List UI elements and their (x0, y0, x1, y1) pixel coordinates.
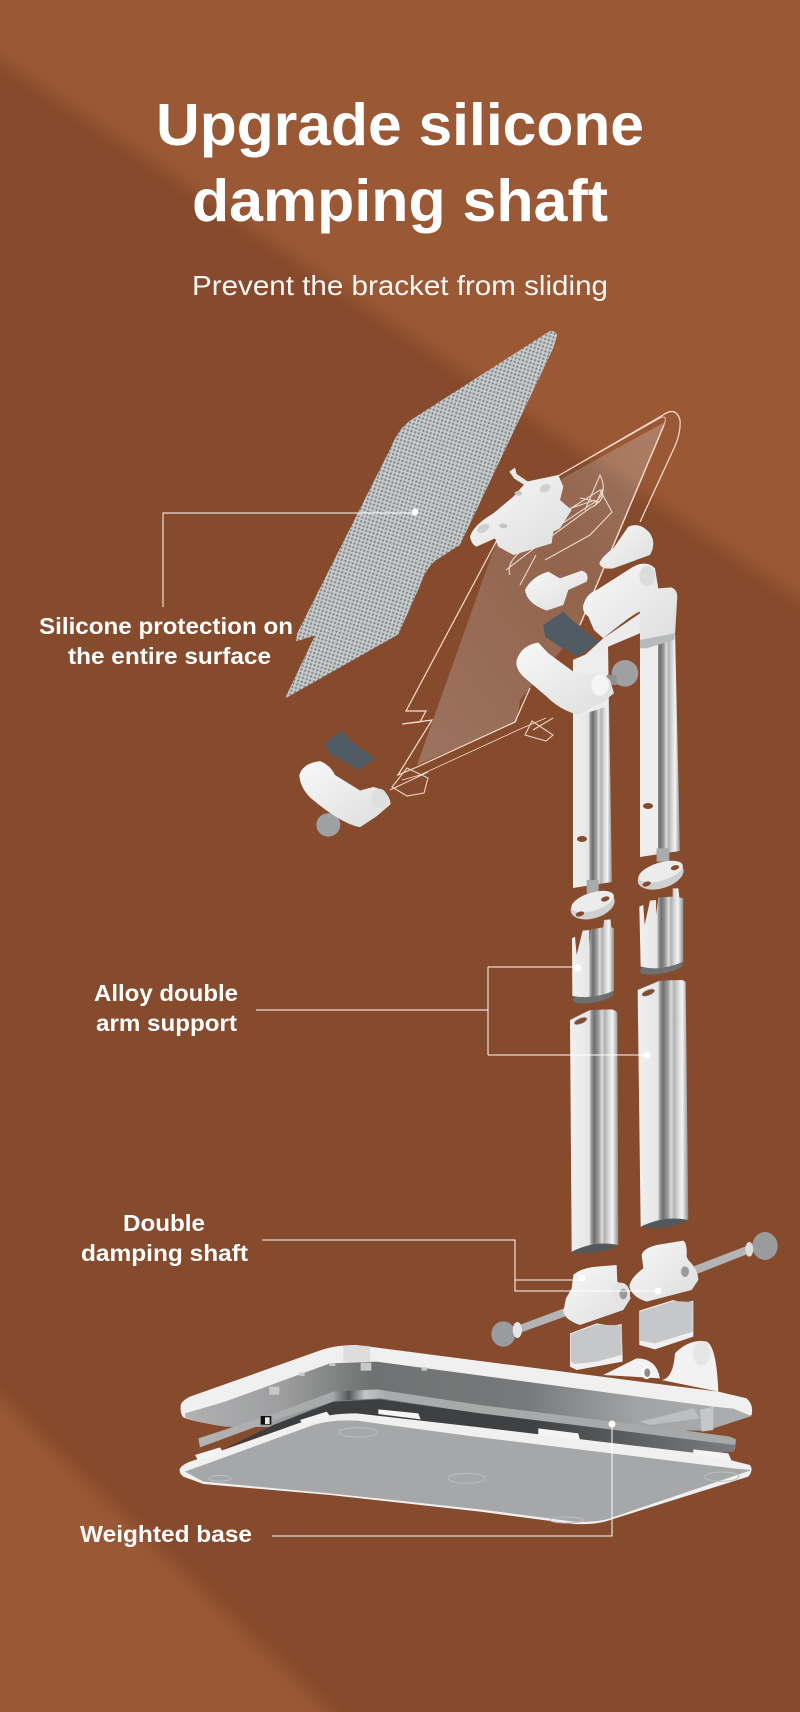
middle weighted plate (198, 1389, 736, 1454)
illustration: lower-left clamp (299, 731, 391, 837)
main cylinder and T-bar (583, 564, 677, 657)
bottom plate (180, 1409, 752, 1524)
silicone mesh sheet (285, 331, 557, 698)
callout: weighted base (80, 1420, 616, 1547)
callout: double damping shaft: damping shaft (81, 1240, 248, 1266)
clamp right (516, 643, 614, 715)
linework of hidden hinge parts (390, 475, 612, 796)
title (156, 92, 644, 234)
illustration: damping hinges (491, 1232, 778, 1370)
callout: weighted base: Weighted base (80, 1521, 252, 1547)
callout: alloy double arm support: arm support (96, 1010, 237, 1036)
clamp left (299, 761, 391, 827)
subtitle: Prevent the bracket from sliding (192, 270, 608, 301)
title: Upgrade silicone (156, 92, 644, 158)
right end cap (634, 848, 687, 895)
screw and knob left (491, 1307, 569, 1347)
transparent plate (390, 411, 680, 796)
short alloy section left (572, 919, 615, 1006)
knob left (316, 813, 340, 837)
left end cap (567, 880, 618, 924)
callout: double damping shaft: Double (123, 1210, 205, 1236)
callout: silicone protection: the entire surface (68, 643, 271, 669)
hinge right (629, 1241, 698, 1302)
short alloy section right (639, 888, 684, 977)
small peg (525, 571, 588, 611)
screw and knob right (688, 1232, 778, 1276)
hinge left (563, 1265, 631, 1325)
right upper arm (640, 630, 680, 857)
illustration: weighted base (180, 1341, 752, 1524)
rubber pad right (543, 612, 599, 657)
upper hinge cylinder (599, 525, 653, 569)
callout: silicone protection (39, 508, 418, 669)
illustration: arm sections (567, 848, 688, 1253)
damping block right (639, 1300, 693, 1349)
right clamp knob (607, 660, 638, 687)
title: damping shaft (192, 168, 608, 234)
callout: silicone protection: Silicone protection on (39, 613, 293, 639)
long tube left (570, 1009, 618, 1253)
illustration: tablet bracket hinge parts (470, 468, 677, 715)
top plate with hinge lugs (181, 1341, 752, 1431)
damping block left (570, 1323, 623, 1370)
rubber pad left (325, 731, 376, 770)
mounting block with pin (470, 468, 572, 555)
top plate interior (185, 1362, 752, 1432)
callout: double damping shaft (81, 1210, 662, 1294)
callout: alloy double arm support (94, 964, 650, 1058)
long tube right (638, 980, 688, 1228)
callout: alloy double arm support: Alloy double (94, 980, 238, 1006)
left upper arm (573, 645, 612, 888)
